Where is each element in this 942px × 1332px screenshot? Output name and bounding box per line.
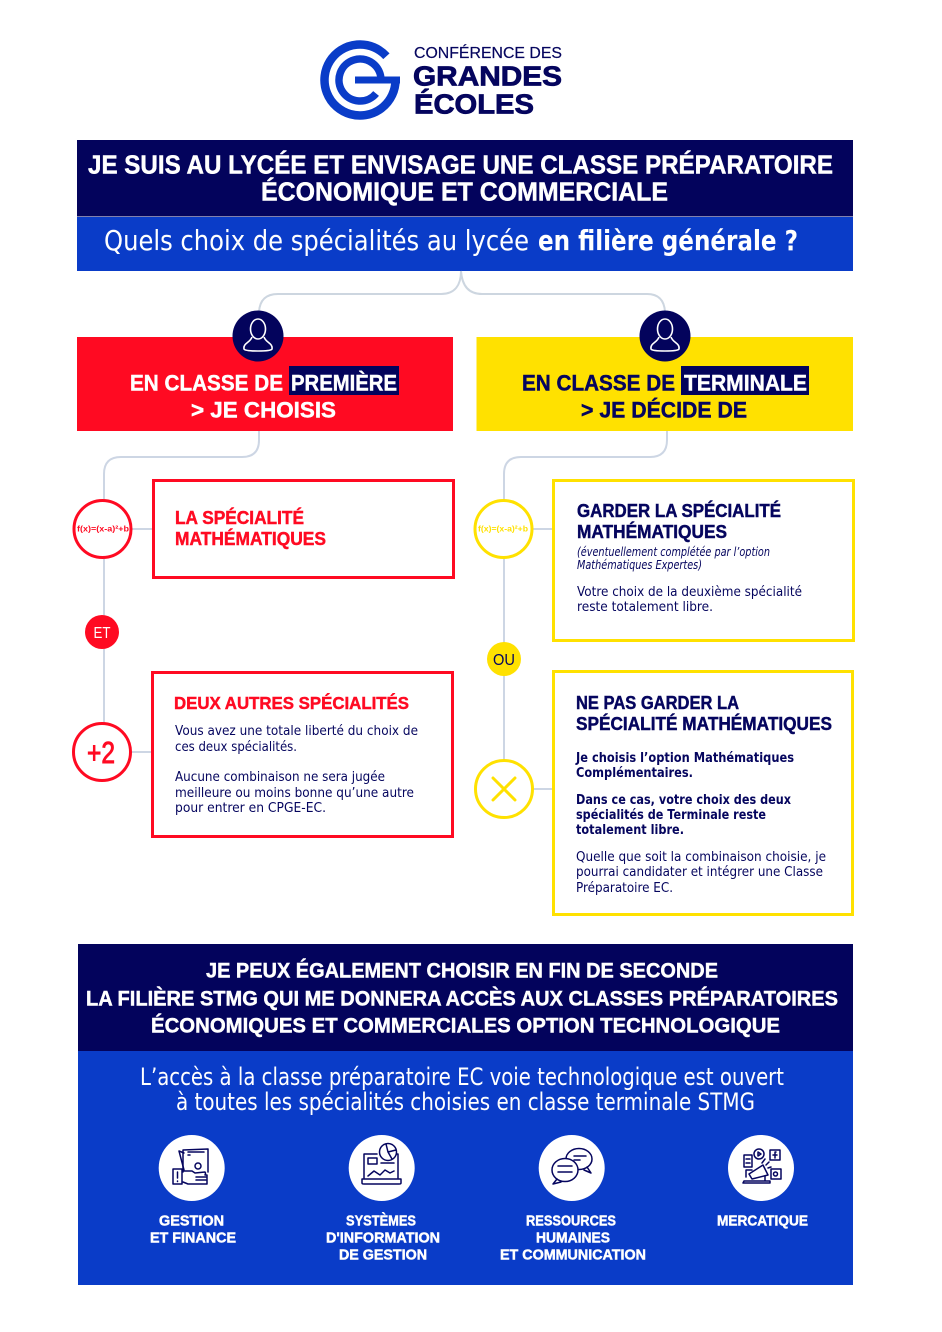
body text: Aucune combinaison ne sera jugée	[175, 769, 385, 785]
bold body text: Dans ce cas, votre choix des deux	[576, 792, 791, 808]
badge: OU	[487, 642, 521, 676]
bold body text: Je choisis l’option Mathématiques	[575, 750, 794, 766]
panel: la spécialité mathématiques: MATHÉMATIQUES	[175, 528, 326, 549]
badge: OU: OU	[493, 652, 515, 669]
body text: pourrai candidater et intégrer une Classe	[576, 864, 823, 880]
panel: deux autres spécialités	[152, 672, 452, 836]
label: mercatique: MERCATIQUE	[717, 1214, 808, 1230]
italic note: Mathématiques Expertes)	[577, 558, 702, 572]
italic note	[577, 545, 770, 572]
label: gestion et finance	[150, 1214, 236, 1246]
banner heading	[130, 370, 397, 422]
icon: mercatique	[728, 1135, 794, 1201]
panel: filière STMG	[78, 944, 853, 1285]
italic note: (éventuellement complétée par l’option	[577, 545, 770, 559]
label: ressources humaines et communication: HUMAINES	[536, 1230, 610, 1246]
icon: formula circle yellow	[475, 500, 532, 558]
label: gestion et finance: GESTION	[159, 1214, 224, 1230]
logo wordmark: CONFÉRENCE DES	[414, 43, 562, 62]
icon: plus two circle: +2	[87, 735, 115, 770]
blue band	[78, 1051, 853, 1285]
highlight: première	[289, 366, 399, 395]
bold body text: Complémentaires.	[576, 765, 693, 781]
bold body text: spécialités de Terminale reste	[576, 807, 766, 823]
yellow banner	[476, 337, 853, 431]
body text: Quelle que soit la combinaison choisie, je	[576, 849, 826, 865]
top branching connector	[259, 271, 665, 312]
icon: formula circle red: f(x)=(x-a)²+b	[77, 524, 129, 534]
banner heading: > JE CHOISIS	[191, 398, 336, 422]
logo wordmark: ÉCOLES	[414, 88, 534, 120]
label: systèmes d'information de gestion: D'INFORMATION	[326, 1230, 440, 1246]
badge: ET	[85, 615, 119, 649]
banner heading: TERMINALE	[684, 370, 807, 396]
panel: en classe de terminale	[476, 310, 853, 431]
STMG heading: JE PEUX ÉGALEMENT CHOISIR EN FIN DE SECONDE	[206, 958, 718, 982]
STMG heading: ÉCONOMIQUES ET COMMERCIALES OPTION TECHNOLOGIQUE	[151, 1012, 780, 1038]
body text: meilleure ou moins bonne qu’une autre	[175, 785, 414, 801]
header panel	[77, 140, 853, 271]
panel: garder la spécialité mathématiques: GARDER LA SPÉCIALITÉ	[577, 500, 781, 521]
body text: reste totalement libre.	[577, 599, 713, 615]
icon: formula circle red	[74, 500, 131, 558]
label: systèmes d'information de gestion: DE GESTION	[339, 1248, 427, 1264]
dark band	[78, 944, 853, 1051]
title: JE SUIS AU LYCÉE ET ENVISAGE UNE CLASSE PRÉPARATOIRE	[88, 150, 833, 180]
right column connector	[504, 431, 667, 789]
body text: Votre choix de la deuxième spécialité	[577, 584, 802, 600]
body text: Vous avez une totale liberté du choix de	[175, 723, 418, 739]
title: ÉCONOMIQUE ET COMMERCIALE	[261, 178, 668, 206]
panel: la spécialité mathématiques	[154, 480, 454, 578]
red banner	[77, 337, 453, 431]
badge: ET: ET	[94, 625, 111, 642]
panel: deux autres spécialités: DEUX AUTRES SPÉCIALITÉS	[174, 692, 409, 713]
title	[88, 150, 833, 206]
icon: cross circle	[476, 760, 532, 818]
panel: ne pas garder la spécialité mathématiques: NE PAS GARDER LA	[576, 693, 739, 713]
access statement	[140, 1063, 784, 1116]
logo wordmark	[413, 43, 562, 120]
panel: la spécialité mathématiques: LA SPÉCIALITÉ	[175, 507, 304, 528]
label: systèmes d'information de gestion: SYSTÈMES	[346, 1212, 416, 1230]
body text: Préparatoire EC.	[576, 880, 673, 896]
logo mark	[325, 44, 400, 115]
body text	[577, 584, 802, 615]
icon: systèmes d'information	[349, 1135, 415, 1201]
panel: garder la spécialité mathématiques	[554, 480, 854, 640]
banner heading: > JE DÉCIDE DE	[581, 398, 747, 422]
person icon	[232, 310, 284, 362]
panel: ne pas garder la spécialité mathématiques	[554, 672, 852, 914]
bold body text	[575, 750, 794, 838]
body text: pour entrer en CPGE-EC.	[175, 800, 326, 816]
subtitle: Quels choix de spécialités au lycée	[104, 224, 529, 257]
subtitle band	[77, 217, 853, 271]
person icon	[640, 310, 690, 362]
label: systèmes d'information de gestion	[326, 1212, 440, 1264]
icon: ressources humaines	[539, 1135, 605, 1201]
panel: ne pas garder la spécialité mathématiques: SPÉCIALITÉ MATHÉMATIQUES	[576, 713, 832, 734]
bold body text: totalement libre.	[576, 822, 684, 838]
icon: formula circle yellow: f(x)=(x-a)²+b	[478, 524, 528, 534]
label: ressources humaines et communication: RESSOURCES	[526, 1214, 616, 1230]
banner heading: PREMIÈRE	[291, 370, 397, 396]
STMG heading: LA FILIÈRE STMG QUI ME DONNERA ACCÈS AUX CLASSES PRÉPARATOIRES	[86, 986, 838, 1010]
access statement: L’accès à la classe préparatoire EC voie technologique est ouvert	[140, 1063, 784, 1091]
access statement: à toutes les spécialités choisies en classe terminale STMG	[176, 1088, 755, 1116]
banner heading: EN CLASSE DE	[522, 370, 675, 396]
icon: gestion et finance	[159, 1135, 225, 1201]
banner heading: EN CLASSE DE	[130, 370, 283, 396]
logo wordmark: GRANDES	[413, 60, 562, 92]
body text	[576, 849, 826, 896]
label: ressources humaines et communication	[500, 1214, 646, 1264]
header dark band	[77, 140, 853, 216]
STMG heading	[86, 958, 838, 1038]
subtitle: en filière générale ?	[538, 224, 798, 257]
logo: Conférence des Grandes Écoles	[325, 43, 562, 120]
panel: garder la spécialité mathématiques: MATHÉMATIQUES	[577, 521, 727, 542]
left column connector	[104, 431, 259, 752]
body text: ces deux spécialités.	[175, 739, 297, 755]
highlight: terminale	[681, 366, 809, 395]
panel: en classe de première	[77, 310, 453, 431]
label: gestion et finance: ET FINANCE	[150, 1230, 236, 1246]
body text	[175, 723, 418, 816]
banner heading	[522, 370, 807, 422]
label: ressources humaines et communication: ET COMMUNICATION	[500, 1248, 646, 1264]
icon: plus two circle	[74, 724, 130, 780]
